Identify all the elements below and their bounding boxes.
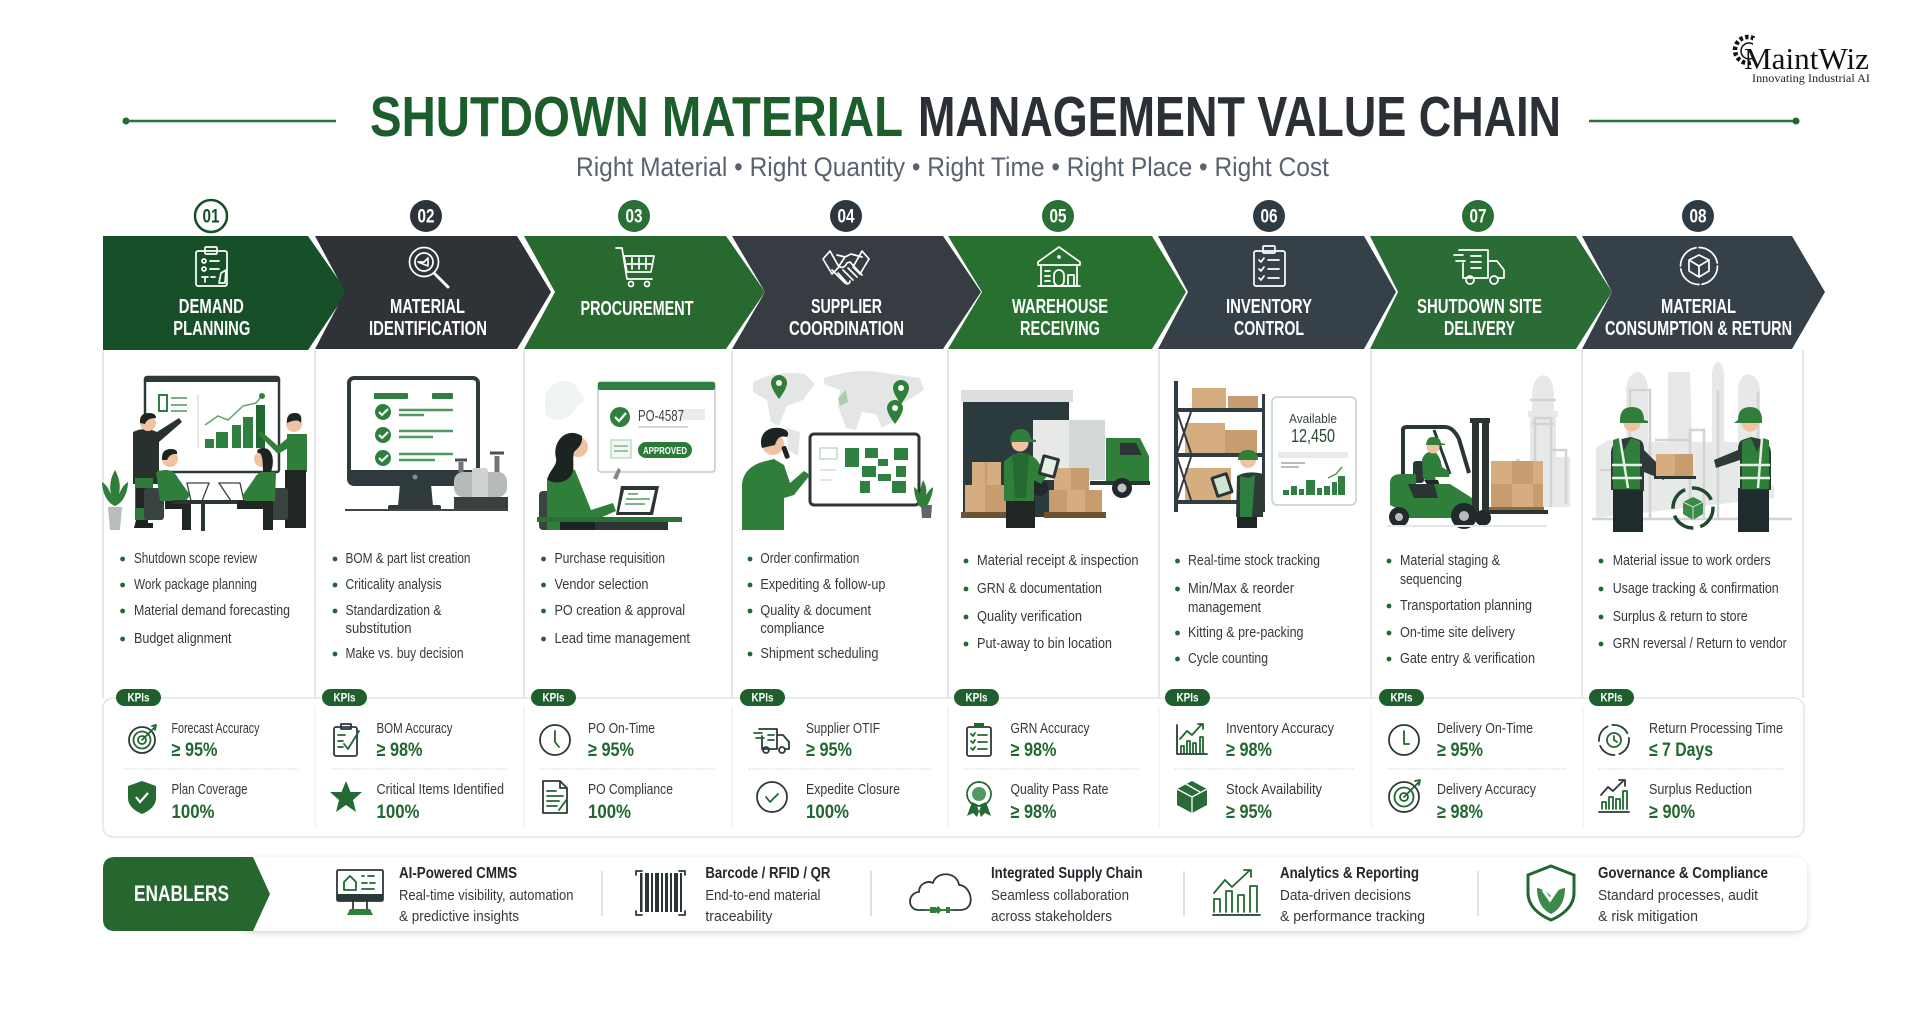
KPIs: supplier coordination: KPIs <box>752 692 774 704</box>
step 04: supplier coordination: COORDINATION <box>789 318 904 340</box>
KPIs: procurement: ≥ 95% <box>588 739 634 761</box>
enabler: AI-powered CMMS: AI-Powered CMMS <box>399 865 517 882</box>
step 08: material consumption and return: CONSUMPTION & RETURN <box>1605 318 1792 340</box>
enabler: barcode / RFID / QR <box>636 865 830 925</box>
KPIs: warehouse receiving: ≥ 98% <box>1010 801 1056 823</box>
step 06: inventory control: INVENTORY <box>1226 296 1312 318</box>
step 08: material consumption and return <box>1582 200 1825 349</box>
bullets: material identification: BOM & part list creation <box>346 551 470 567</box>
step 01: demand planning: PLANNING <box>173 318 250 340</box>
step 07: shutdown site delivery: SHUTDOWN SITE <box>1417 296 1542 318</box>
step 05: warehouse receiving: RECEIVING <box>1020 318 1100 340</box>
bullets: procurement: Vendor selection <box>554 577 648 593</box>
step 01: demand planning: DEMAND <box>179 296 244 318</box>
enabler: integrated supply chain: Integrated Supply Chain <box>991 865 1142 882</box>
bullets: material consumption and return: GRN reversal / Return to vendor <box>1613 636 1787 652</box>
bullets: warehouse receiving: Put-away to bin location <box>977 636 1112 652</box>
column outlines <box>103 350 1803 698</box>
bullets: inventory control: Kitting & pre-packing <box>1188 625 1304 641</box>
enabler: barcode / RFID / QR: End-to-end material <box>705 887 820 904</box>
KPIs: warehouse receiving: ≥ 98% <box>1010 739 1056 761</box>
bullets: demand planning: Work package planning <box>134 577 257 593</box>
enabler: governance and compliance <box>1528 865 1768 925</box>
bullets: inventory control: Min/Max & reorder <box>1188 581 1294 597</box>
KPIs: inventory control: Inventory Accuracy <box>1226 721 1335 737</box>
KPIs: warehouse receiving: GRN Accuracy <box>1010 721 1090 737</box>
enabler: integrated supply chain: Seamless collaboration <box>991 887 1129 904</box>
illustration: inventory rack and stock dashboard <box>1174 381 1356 528</box>
step 04: supplier coordination: SUPPLIER <box>811 296 882 318</box>
illustration: supplier call with world map <box>742 371 933 530</box>
KPIs: material identification: 100% <box>376 801 420 823</box>
bullets: warehouse receiving: Quality verification <box>977 609 1082 625</box>
illustration: planning team at whiteboard <box>102 377 307 531</box>
KPIs: supplier coordination: ≥ 95% <box>806 739 852 761</box>
step 07: shutdown site delivery: DELIVERY <box>1444 318 1515 340</box>
KPIs: material identification <box>322 689 504 823</box>
step 01: demand planning <box>103 200 347 350</box>
bullets: demand planning: Material demand forecasting <box>134 603 290 619</box>
bullets: demand planning: Shutdown scope review <box>134 551 257 567</box>
bullets: inventory control: Cycle counting <box>1188 651 1268 667</box>
step 03: procurement: PROCUREMENT <box>580 298 694 320</box>
bullets: inventory control <box>1175 553 1320 667</box>
logo: MaintWiz: MaintWiz <box>1744 41 1869 76</box>
enabler: analytics and reporting <box>1213 865 1425 925</box>
illustration: warehouse receiving with truck <box>961 390 1150 528</box>
enabler: AI-powered CMMS <box>337 865 574 925</box>
KPIs: demand planning: 100% <box>172 801 214 823</box>
bullets: material identification: Criticality analysis <box>346 577 442 593</box>
KPIs: material consumption and return: KPIs <box>1600 692 1622 704</box>
title <box>122 85 1800 149</box>
KPIs: inventory control: KPIs <box>1176 692 1198 704</box>
KPIs: material consumption and return: ≤ 7 Days <box>1649 739 1713 761</box>
KPIs: demand planning: Forecast Accuracy <box>172 721 260 737</box>
KPIs: shutdown site delivery: Delivery On-Time <box>1437 721 1533 737</box>
panel: enablers <box>103 857 1807 931</box>
enabler: AI-powered CMMS: Real-time visibility, automation <box>399 887 574 904</box>
bullets: material identification <box>333 551 470 662</box>
enabler: integrated supply chain: across stakeholders <box>991 908 1112 925</box>
bullets: material consumption and return: Material issue to work orders <box>1613 553 1771 569</box>
KPIs: procurement: KPIs <box>542 692 564 704</box>
step 06: inventory control <box>1158 200 1396 349</box>
bullets: procurement: PO creation & approval <box>554 603 685 619</box>
step 01: demand planning: 01 <box>202 206 220 228</box>
enablers badge <box>103 857 270 931</box>
bullets: supplier coordination: Order confirmation <box>760 551 859 567</box>
bullets: shutdown site delivery <box>1387 553 1535 667</box>
step 04: supplier coordination <box>732 200 981 349</box>
KPIs: inventory control: ≥ 98% <box>1226 739 1272 761</box>
KPIs: shutdown site delivery: KPIs <box>1390 692 1412 704</box>
KPIs: shutdown site delivery: ≥ 98% <box>1437 801 1483 823</box>
enabler: analytics and reporting: & performance tracking <box>1280 908 1425 925</box>
bullets: supplier coordination <box>748 551 885 662</box>
step 06: inventory control: 06 <box>1260 206 1278 228</box>
bullets: demand planning <box>120 551 290 647</box>
KPIs: material identification: KPIs <box>334 692 356 704</box>
bullets: warehouse receiving: GRN & documentation <box>977 581 1102 597</box>
panel: KPIs <box>103 689 1804 837</box>
step 05: warehouse receiving <box>948 200 1186 349</box>
bullets: shutdown site delivery: Material staging & <box>1400 553 1500 569</box>
KPIs: material consumption and return: ≥ 90% <box>1649 801 1695 823</box>
bullets: supplier coordination: Shipment scheduling <box>760 646 878 662</box>
step 05: warehouse receiving: WAREHOUSE <box>1012 296 1108 318</box>
bullets: supplier coordination: compliance <box>760 621 824 637</box>
step 04: supplier coordination: 04 <box>838 206 855 228</box>
KPIs: warehouse receiving: KPIs <box>966 692 988 704</box>
enabler: governance and compliance: Governance & Compliance <box>1598 865 1768 882</box>
bullets: shutdown site delivery: On-time site delivery <box>1400 625 1516 641</box>
bullets: material consumption and return <box>1599 553 1787 652</box>
step 05: warehouse receiving: 05 <box>1050 206 1067 228</box>
step 02: material identification: MATERIAL <box>390 296 465 318</box>
KPIs: procurement: 100% <box>588 801 631 823</box>
KPIs: demand planning: KPIs <box>128 692 150 704</box>
KPIs: material consumption and return <box>1589 689 1783 823</box>
KPIs: procurement: PO On-Time <box>588 721 655 737</box>
illustration: purchase order approval: APPROVED <box>643 446 687 457</box>
logo: MaintWiz: Innovating Industrial AI <box>1752 73 1870 85</box>
enablers badge: ENABLERS <box>134 881 229 906</box>
enabler: analytics and reporting: Data-driven decisions <box>1280 887 1411 904</box>
bullets: warehouse receiving <box>964 553 1139 652</box>
illustration: inventory rack and stock dashboard: Available <box>1289 411 1337 426</box>
bullets: shutdown site delivery: Transportation planning <box>1400 598 1532 614</box>
KPIs: inventory control <box>1165 689 1335 823</box>
KPIs: shutdown site delivery <box>1379 689 1537 823</box>
bullets: inventory control: Real-time stock tracking <box>1188 553 1320 569</box>
illustration: material handover with return loop <box>1592 362 1792 532</box>
bullets: shutdown site delivery: sequencing <box>1400 572 1462 588</box>
step 03: procurement: 03 <box>626 206 642 228</box>
title: SHUTDOWN MATERIAL <box>370 85 903 149</box>
KPIs: inventory control: ≥ 95% <box>1226 801 1272 823</box>
step 07: shutdown site delivery <box>1370 200 1612 349</box>
bullets: inventory control: management <box>1188 600 1261 616</box>
bullets: supplier coordination: Quality & document <box>760 603 871 619</box>
illustration: forklift delivering to site <box>1387 375 1570 529</box>
bullets: material identification: Standardization & <box>346 603 442 619</box>
enabler: governance and compliance: Standard processes, audit <box>1598 887 1759 904</box>
bullets: procurement: Lead time management <box>554 631 690 647</box>
title: MANAGEMENT VALUE CHAIN <box>918 85 1561 149</box>
enabler: governance and compliance: & risk mitigation <box>1598 908 1698 925</box>
bullets: material consumption and return: Usage tracking & confirmation <box>1613 581 1779 597</box>
enabler: analytics and reporting: Analytics & Reporting <box>1280 865 1419 882</box>
illustration: purchase order approval: PO-4587 <box>638 408 684 425</box>
enabler: barcode / RFID / QR: traceability <box>705 908 773 925</box>
bullets: material identification: substitution <box>346 621 412 637</box>
KPIs: supplier coordination <box>740 689 900 823</box>
step 08: material consumption and return: MATERIAL <box>1661 296 1736 318</box>
bullets: warehouse receiving: Material receipt & inspection <box>977 553 1139 569</box>
step 02: material identification: IDENTIFICATION <box>369 318 487 340</box>
step 02: material identification: 02 <box>418 206 434 228</box>
bullets: material consumption and return: Surplus & return to store <box>1613 609 1748 625</box>
step 03: procurement <box>524 200 765 349</box>
KPIs: supplier coordination: Supplier OTIF <box>806 721 880 737</box>
bullets: demand planning: Budget alignment <box>134 631 232 647</box>
step 06: inventory control: CONTROL <box>1234 318 1304 340</box>
bullets: procurement: Purchase requisition <box>554 551 665 567</box>
KPIs: inventory control: Stock Availability <box>1226 782 1323 798</box>
bullets: supplier coordination: Expediting & follow-up <box>760 577 885 593</box>
KPIs: shutdown site delivery: ≥ 95% <box>1437 739 1483 761</box>
step 07: shutdown site delivery: 07 <box>1470 206 1486 228</box>
subtitle: Right Material • Right Quantity • Right Time • Right Place • Right Cost <box>576 152 1329 182</box>
KPIs: demand planning <box>116 689 260 823</box>
KPIs: supplier coordination: 100% <box>806 801 849 823</box>
KPIs: procurement <box>531 689 673 823</box>
logo: MaintWiz <box>1735 37 1870 85</box>
step 02: material identification <box>315 200 551 349</box>
KPIs: warehouse receiving: Quality Pass Rate <box>1010 782 1108 798</box>
KPIs: demand planning: ≥ 95% <box>172 739 218 761</box>
bullets: shutdown site delivery: Gate entry & verification <box>1400 651 1535 667</box>
illustration: inventory rack and stock dashboard: 12,450 <box>1291 426 1335 446</box>
KPIs: procurement: PO Compliance <box>588 782 673 798</box>
KPIs: supplier coordination: Expedite Closure <box>806 782 900 798</box>
KPIs: material identification: BOM Accuracy <box>376 721 453 737</box>
KPIs: shutdown site delivery: Delivery Accuracy <box>1437 782 1537 798</box>
enabler: barcode / RFID / QR: Barcode / RFID / QR <box>705 865 830 882</box>
KPIs: material identification: ≥ 98% <box>376 739 422 761</box>
KPIs: material identification: Critical Items Identified <box>376 782 504 798</box>
illustration: purchase order approval <box>537 381 715 530</box>
KPIs: material consumption and return: Return Processing Time <box>1649 721 1783 737</box>
enabler: integrated supply chain <box>910 865 1142 925</box>
bullets: material identification: Make vs. buy decision <box>346 646 464 662</box>
illustration: BOM checklist on monitor with pump <box>345 378 508 511</box>
KPIs: warehouse receiving <box>954 689 1108 823</box>
KPIs: material consumption and return: Surplus Reduction <box>1649 782 1752 798</box>
KPIs: demand planning: Plan Coverage <box>172 782 248 798</box>
bullets: procurement <box>541 551 690 647</box>
step 08: material consumption and return: 08 <box>1690 206 1706 228</box>
enabler: AI-powered CMMS: & predictive insights <box>399 908 519 925</box>
